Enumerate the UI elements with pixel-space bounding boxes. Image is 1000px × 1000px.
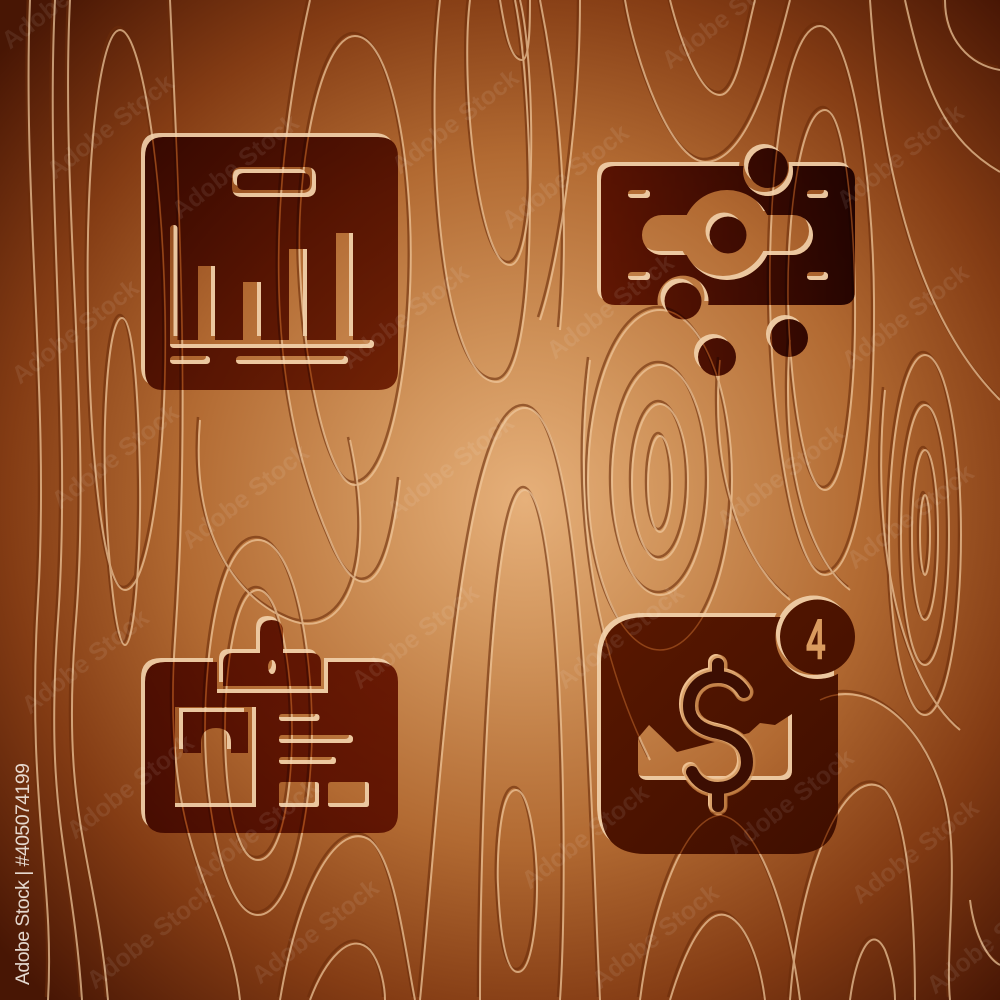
stock watermarks: Adobe Stock — [386, 64, 524, 180]
stock watermarks: Adobe Stock — [176, 439, 314, 555]
stock watermarks: Adobe Stock — [6, 274, 144, 390]
stock watermarks: Adobe Stock — [831, 99, 969, 215]
stock watermarks: Adobe Stock — [41, 69, 179, 185]
stock watermarks: Adobe Stock — [16, 604, 154, 720]
badge number: 4 — [807, 609, 825, 670]
stock watermarks: Adobe Stock — [846, 794, 984, 910]
icon: dollar notification with count badge — [597, 596, 855, 854]
icon: analytics board with bar chart — [141, 133, 398, 390]
stock watermarks: Adobe Stock — [516, 779, 654, 895]
stock watermarks: Adobe Stock — [61, 729, 199, 845]
stock watermarks: Adobe Stock — [166, 109, 304, 225]
stock watermarks: Adobe Stock — [541, 249, 679, 365]
stock watermarks: Adobe Stock — [246, 874, 384, 990]
stock watermarks: Adobe Stock — [586, 879, 724, 995]
stock watermarks: Adobe Stock — [841, 459, 979, 575]
stock watermarks: Adobe Stock — [346, 579, 484, 695]
stock watermarks: Adobe Stock — [336, 259, 474, 375]
stock image id: Adobe Stock | #405074199 — [12, 763, 34, 985]
stock watermarks: Adobe Stock — [496, 119, 634, 235]
stock watermarks: Adobe Stock — [381, 409, 519, 525]
icon: identification badge — [141, 616, 398, 833]
stock watermarks: Adobe Stock — [836, 259, 974, 375]
grain highlights showing through the icons — [152, 137, 855, 854]
stock watermarks: Adobe Stock — [551, 579, 689, 695]
stock watermarks: Adobe Stock — [721, 744, 859, 860]
icon: banknote with coins — [597, 144, 855, 376]
stock watermarks: Adobe Stock — [186, 774, 324, 890]
stock watermarks: Adobe Stock — [46, 399, 184, 515]
stock watermarks: Adobe Stock — [81, 879, 219, 995]
stock watermarks: Adobe Stock — [711, 419, 849, 535]
